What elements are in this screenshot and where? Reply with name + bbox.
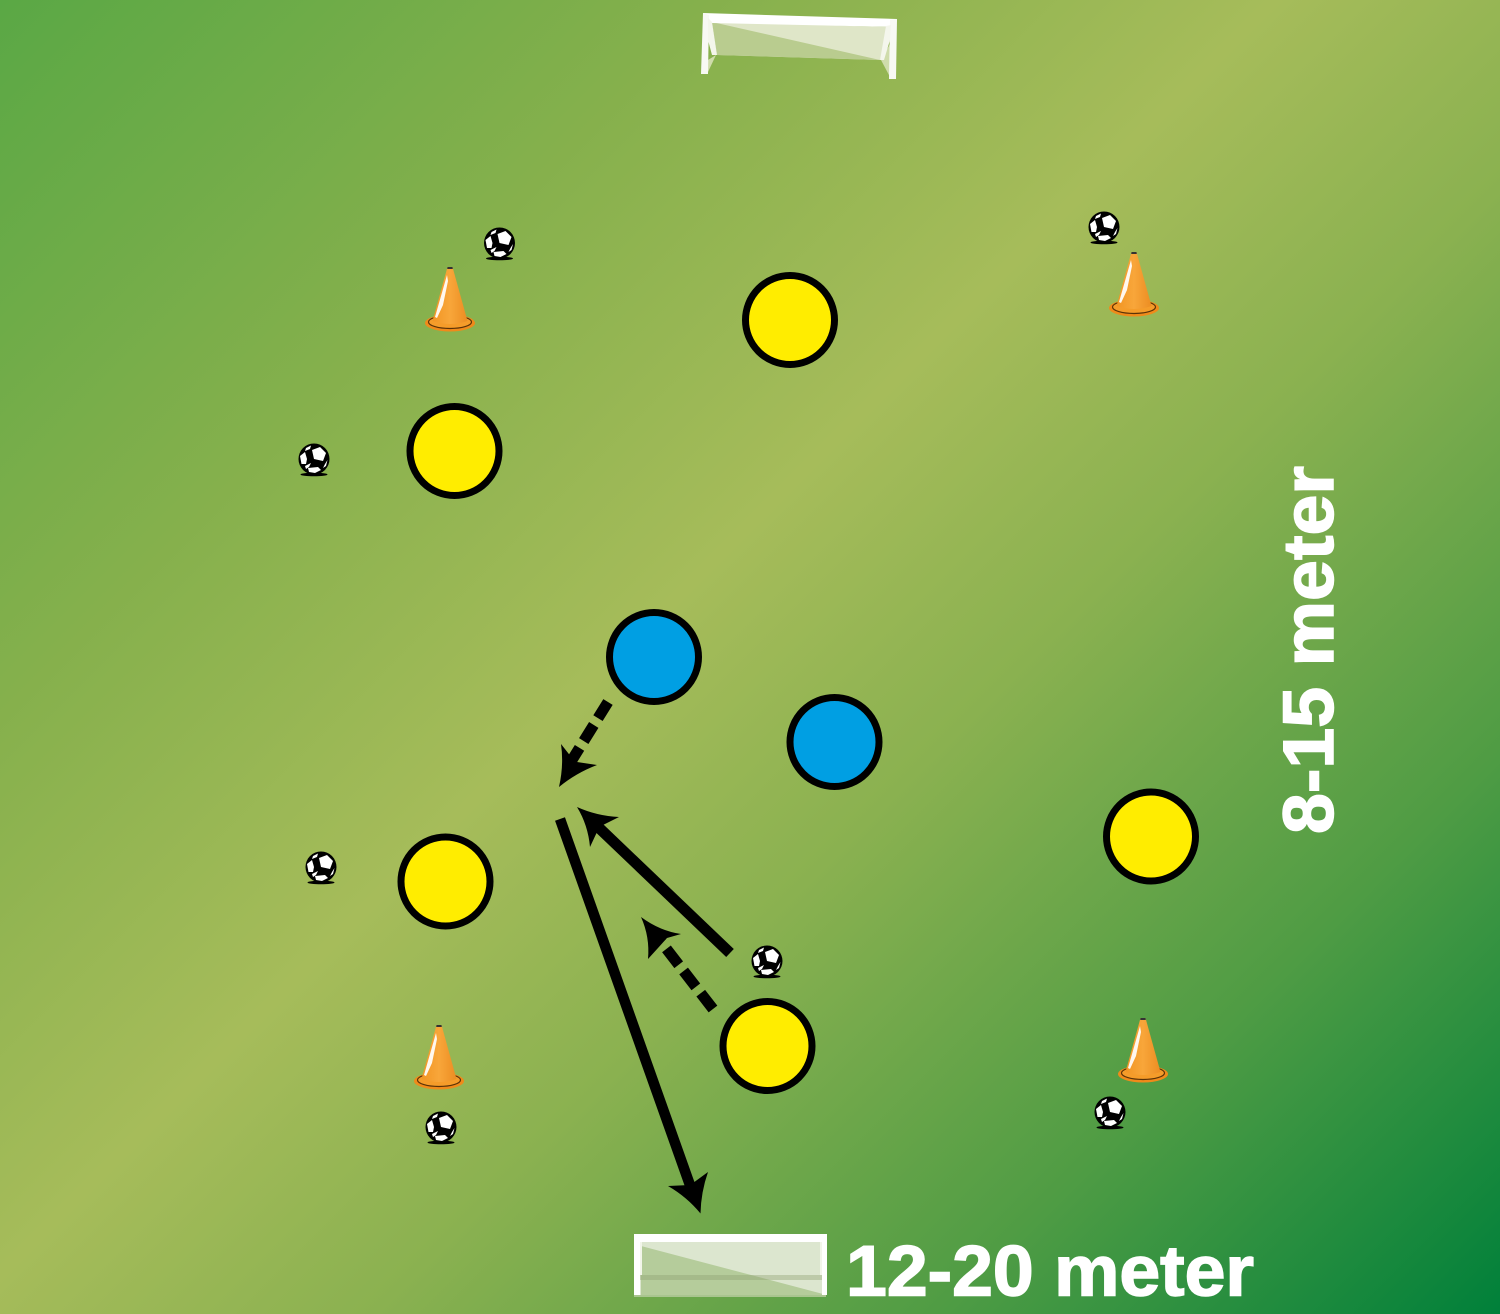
ball [306,852,336,884]
ball [484,228,515,260]
label: width: 12-20 meter [846,1232,1254,1312]
bottom goal [634,1234,827,1297]
yellow player [410,406,499,496]
top goal [701,13,897,79]
cone [414,1025,464,1090]
cone [1118,1018,1168,1082]
ball [1088,212,1120,244]
arrow: dashed yellow run [641,917,713,1009]
arrow: dashed blue run [559,702,608,787]
ball [752,946,782,978]
label: length: 8-15 meter [1270,466,1349,834]
ball [298,444,330,476]
blue player [790,698,879,786]
cone [1109,252,1159,316]
blue player [610,612,698,702]
arrow: solid shot to goal [560,819,708,1214]
ball [1094,1096,1126,1129]
ball [426,1112,456,1144]
cone [425,267,475,332]
arrow: solid pass to centre [577,807,730,953]
yellow player [746,276,834,364]
yellow player [1106,792,1196,881]
yellow player [723,1002,812,1090]
yellow player [401,837,490,926]
